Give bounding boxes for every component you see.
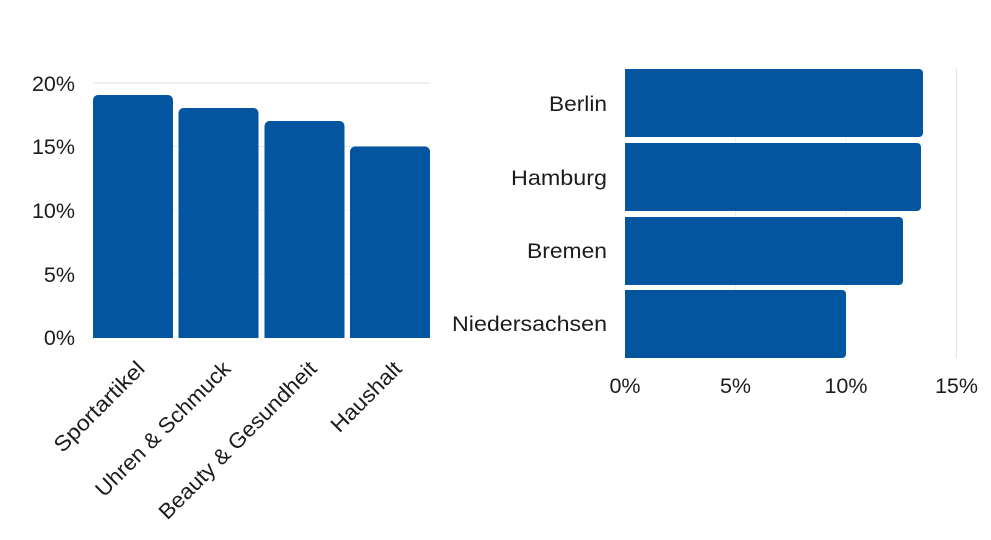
bar chart: federal states: [452, 69, 978, 398]
x axis labels: [49, 356, 407, 524]
y axis labels: 15%: [32, 135, 75, 159]
x axis labels: 10%: [824, 374, 868, 398]
x axis labels: 15%: [935, 374, 978, 398]
y axis labels: 20%: [32, 72, 75, 96]
state labels: Niedersachsen: [452, 312, 607, 336]
x axis labels: Sportartikel: [49, 357, 150, 457]
state labels: Berlin: [549, 92, 607, 116]
y axis labels: 5%: [44, 263, 75, 287]
y axis labels: 10%: [32, 199, 75, 223]
x axis labels: Haushalt: [326, 357, 407, 437]
state labels: Bremen: [527, 239, 607, 263]
bars: states: [625, 69, 923, 358]
x axis labels: [609, 374, 978, 398]
bars: categories: [93, 95, 430, 338]
y axis labels: [32, 72, 75, 350]
column chart: product categories: [32, 72, 430, 524]
x axis labels: Beauty & Gesundheit: [154, 357, 322, 524]
y axis labels: 0%: [44, 326, 75, 350]
state labels: Hamburg: [511, 166, 607, 190]
x axis labels: Uhren & Schmuck: [91, 356, 236, 502]
x axis labels: 5%: [720, 374, 751, 398]
x axis labels: 0%: [609, 374, 641, 398]
state labels: [452, 92, 607, 336]
